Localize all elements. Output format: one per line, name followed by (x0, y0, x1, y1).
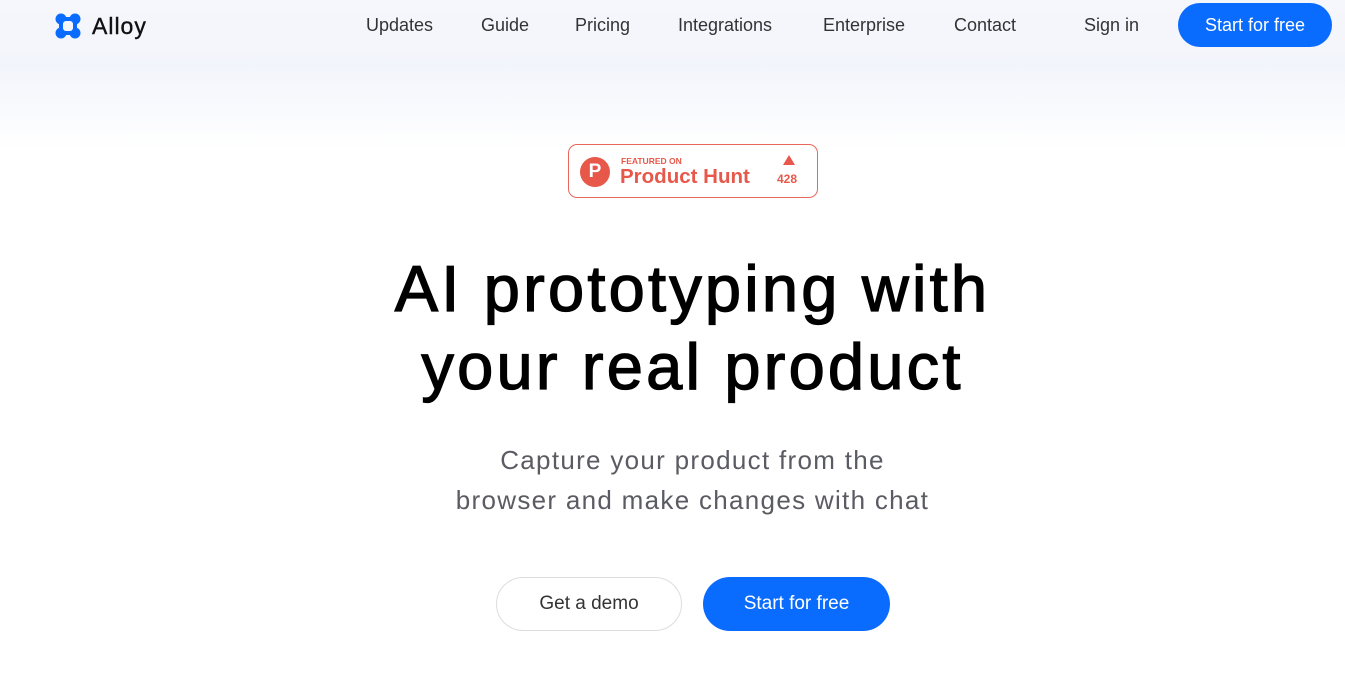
title (394, 252, 990, 404)
button: get a demo (496, 577, 682, 631)
button: get a demo: Get a demo (539, 593, 639, 614)
navigation: Guide (481, 15, 529, 35)
badge: product hunt: 428 (777, 172, 797, 186)
badge: product hunt: Product Hunt (620, 165, 750, 188)
icon: P (580, 157, 610, 187)
logo: Alloy (92, 13, 147, 39)
button: start for free: Start for free (744, 593, 849, 614)
navigation: Integrations (678, 15, 772, 35)
subtitle (456, 445, 929, 515)
navigation (366, 15, 1139, 35)
title: AI prototyping with (395, 252, 990, 325)
badge: product hunt: FEATURED ON (621, 156, 682, 166)
icon: P: P (589, 161, 601, 182)
navigation: Enterprise (823, 15, 905, 35)
logo (56, 13, 147, 40)
icon: logo mark (56, 14, 80, 38)
title: your real product (421, 330, 964, 403)
badge: product hunt (568, 144, 818, 198)
button: header start for free (1178, 3, 1332, 47)
navigation: Sign in (1084, 15, 1139, 35)
subtitle: browser and make changes with chat (456, 485, 929, 515)
button: header start for free: Start for free (1205, 14, 1305, 34)
navigation: Pricing (575, 15, 630, 35)
navigation: Updates (366, 15, 433, 35)
button: start for free (703, 577, 890, 631)
subtitle: Capture your product from the (500, 445, 885, 475)
navigation: Contact (954, 15, 1016, 35)
